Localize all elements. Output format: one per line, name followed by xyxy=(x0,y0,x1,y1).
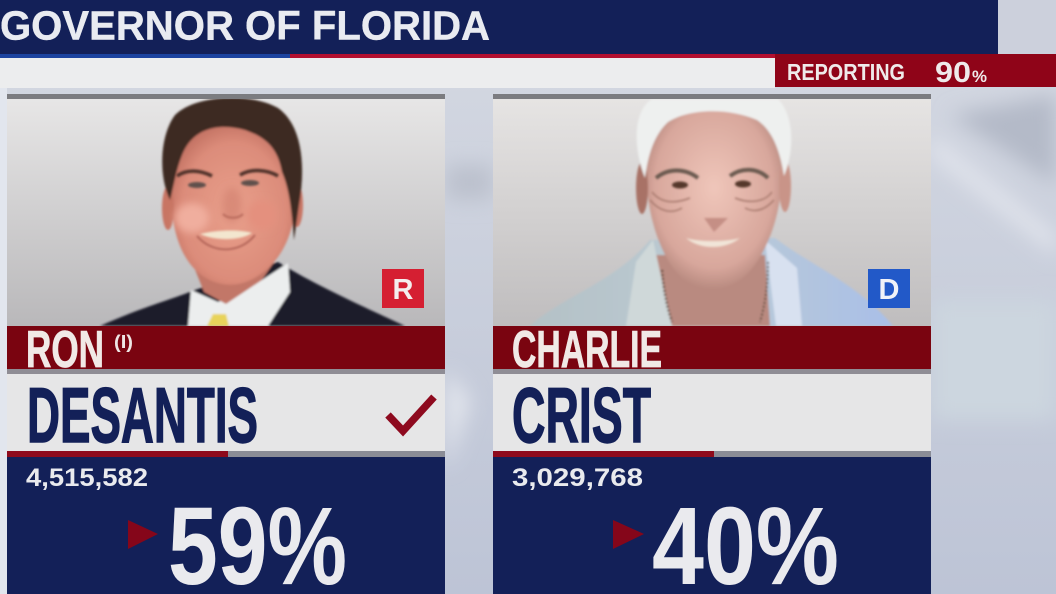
first name bar: (I) xyxy=(114,332,133,352)
first name bar xyxy=(493,321,931,379)
reporting badge: REPORTING xyxy=(787,59,905,85)
first name bar xyxy=(7,321,445,379)
results block: 4,515,582 xyxy=(26,464,148,492)
portrait: Charlie Crist xyxy=(493,99,931,326)
panel: DeSantis xyxy=(7,94,445,594)
icon: arrow xyxy=(613,520,644,549)
first name bar: RON xyxy=(26,321,104,379)
icon: winner check mark xyxy=(388,397,434,431)
icon: arrow xyxy=(128,520,158,549)
party badge: D xyxy=(868,269,910,308)
results block xyxy=(493,457,931,594)
last name bar: CRIST xyxy=(512,371,651,459)
title: GOVERNOR OF FLORIDA xyxy=(0,2,490,48)
last name bar xyxy=(493,371,931,459)
party badge: D: D xyxy=(879,274,899,306)
reporting badge xyxy=(775,54,1056,89)
results block xyxy=(7,457,445,594)
party badge: R xyxy=(382,269,424,308)
party badge: R: R xyxy=(393,274,414,306)
results block: 3,029,768 xyxy=(512,464,643,492)
light strip under header xyxy=(0,58,775,88)
panel: Crist xyxy=(493,94,931,594)
reporting badge: % xyxy=(972,67,987,86)
last name bar: DESANTIS xyxy=(27,371,258,459)
portrait: Ron DeSantis xyxy=(7,98,445,326)
header banner xyxy=(0,0,1056,58)
first name bar: CHARLIE xyxy=(512,321,662,379)
reporting badge: 90 xyxy=(935,57,971,89)
vote share bar xyxy=(493,451,931,457)
vote share bar xyxy=(7,451,445,457)
